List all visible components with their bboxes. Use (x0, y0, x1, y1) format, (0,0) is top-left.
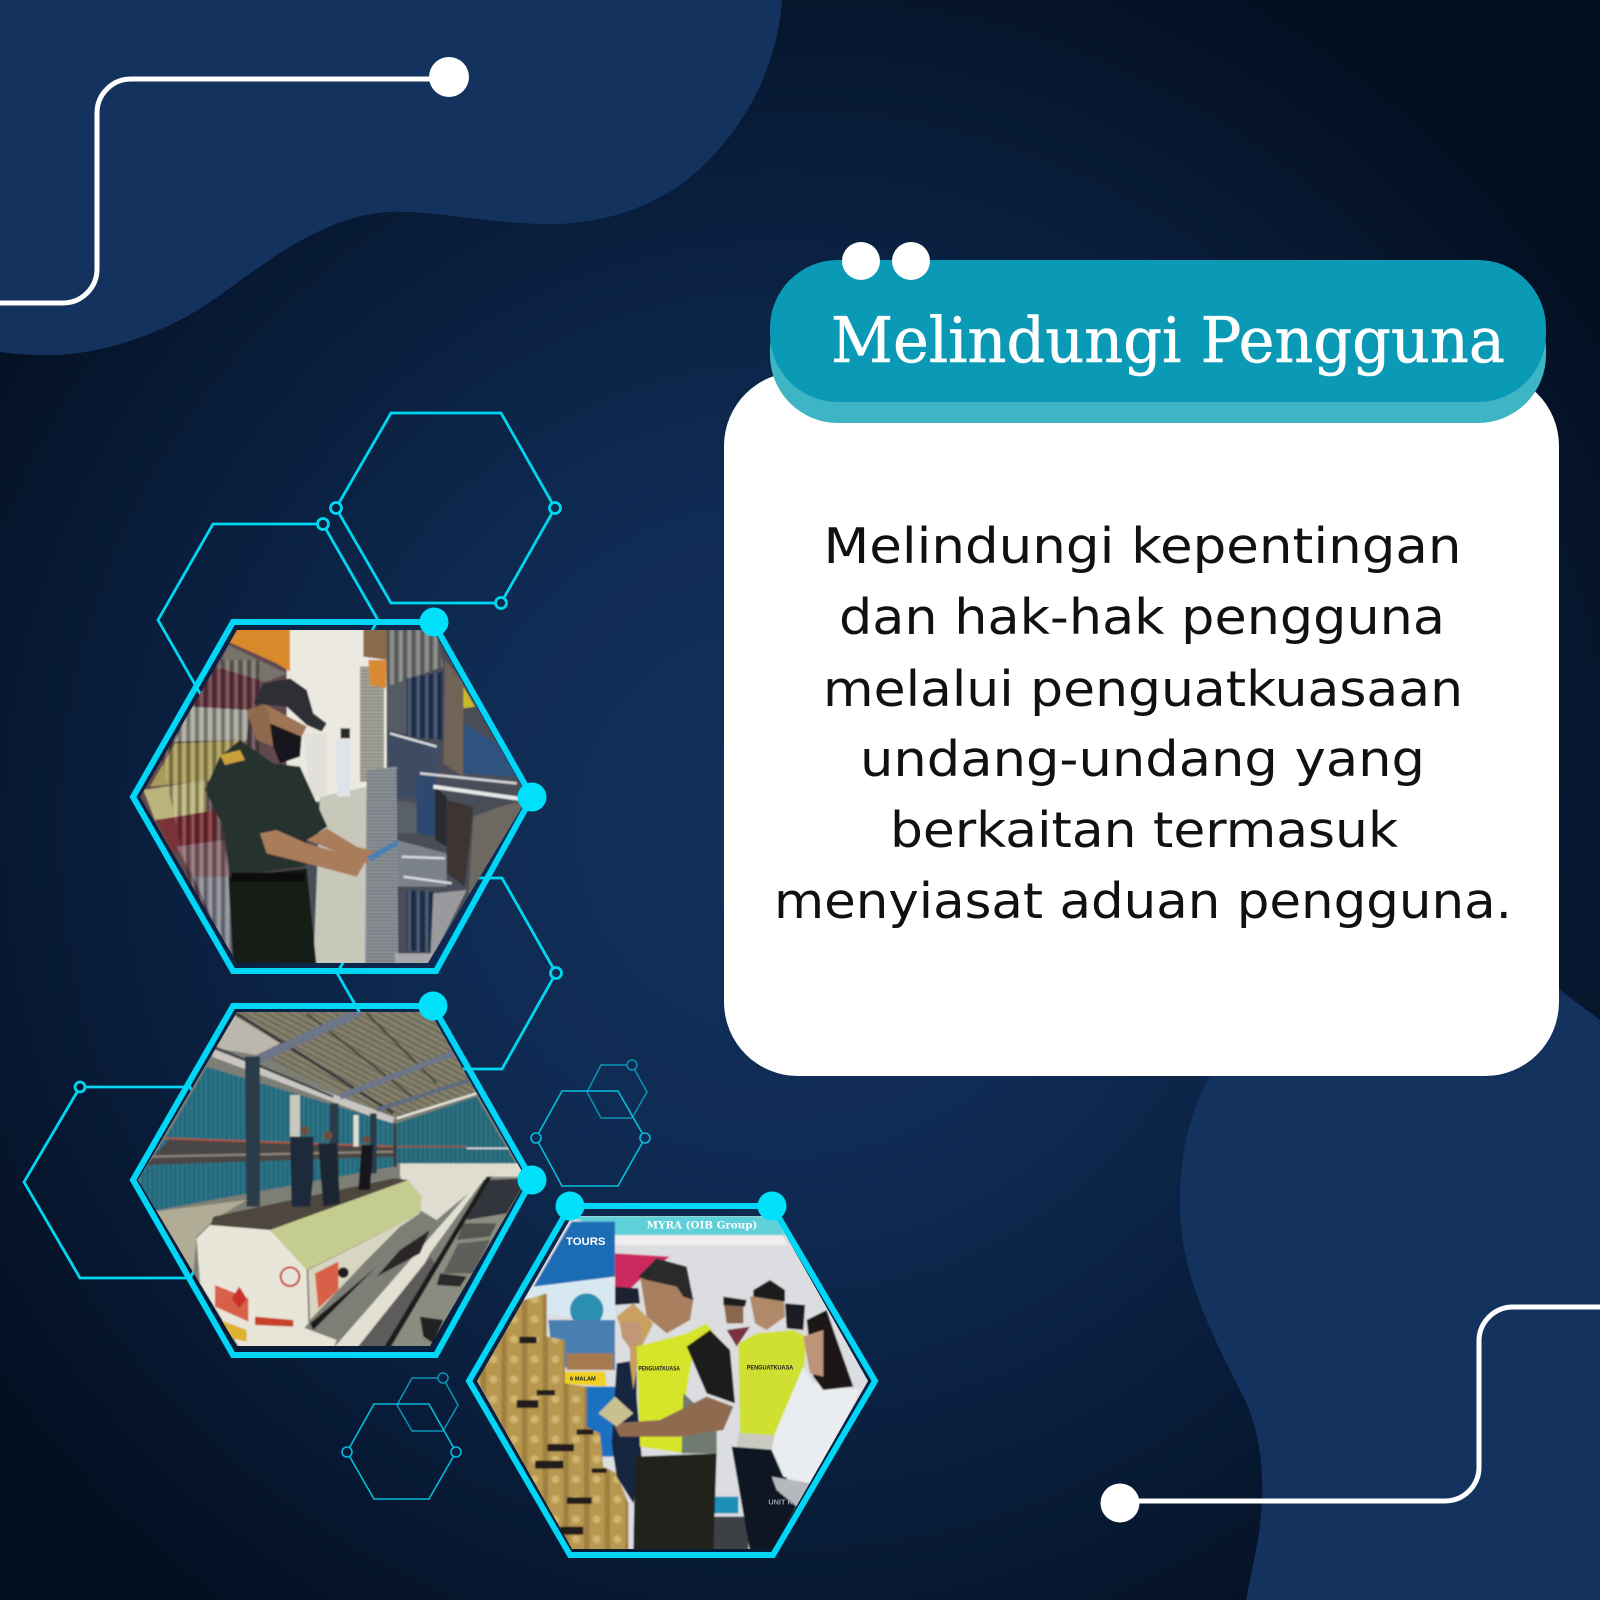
outline hexagon D (24, 1082, 245, 1278)
photo 2 (133, 1010, 533, 1350)
photo 3: PENGUATKUASA (638, 1366, 680, 1373)
connector line: top left (0, 57, 469, 303)
frame 1 (133, 622, 532, 971)
frame 2 (133, 1006, 532, 1355)
body text: berkaitan termasuk (890, 802, 1399, 859)
photo hexagon 3: officers checking food jars (469, 1192, 875, 1555)
body text: dan hak-hak pengguna (839, 589, 1445, 646)
small hexagon E (531, 1091, 650, 1186)
photo 3: UNIT K (768, 1498, 793, 1507)
outline hexagon A (330, 413, 560, 608)
photo 3: TOURS (566, 1236, 606, 1248)
body text: undang-undang yang (860, 731, 1425, 788)
blob: top left (0, 0, 782, 355)
body text: melalui penguatkuasaan (823, 661, 1463, 718)
photo 3: MYRA (OIB Group) (647, 1219, 757, 1232)
body text (774, 518, 1512, 930)
title: Melindungi Pengguna (831, 304, 1505, 377)
outline hexagon B (158, 518, 378, 716)
small hexagon F (587, 1060, 647, 1118)
blob: bottom right (1180, 975, 1600, 1600)
small hexagon G (342, 1404, 461, 1499)
photo hexagon 1: officer inspecting shop goods (133, 608, 546, 971)
photo 1 (133, 627, 533, 970)
small hexagon H (397, 1373, 458, 1431)
frame 3 (469, 1206, 875, 1555)
outline hexagon C (337, 878, 562, 1069)
connector line: bottom right (1100, 1307, 1600, 1522)
photo hexagon 2: tanker at enforcement site (133, 992, 546, 1355)
body text: menyiasat aduan pengguna. (774, 873, 1512, 930)
thin hexagon outlines (24, 413, 650, 1499)
body text: Melindungi kepentingan (824, 518, 1462, 575)
photo 3: PENGUATKUASA (747, 1365, 794, 1371)
photo 3: 6 MALAM (570, 1377, 596, 1383)
heading pill (770, 242, 1546, 423)
panel: white text card (724, 372, 1559, 1076)
photo 3 (470, 1213, 873, 1553)
